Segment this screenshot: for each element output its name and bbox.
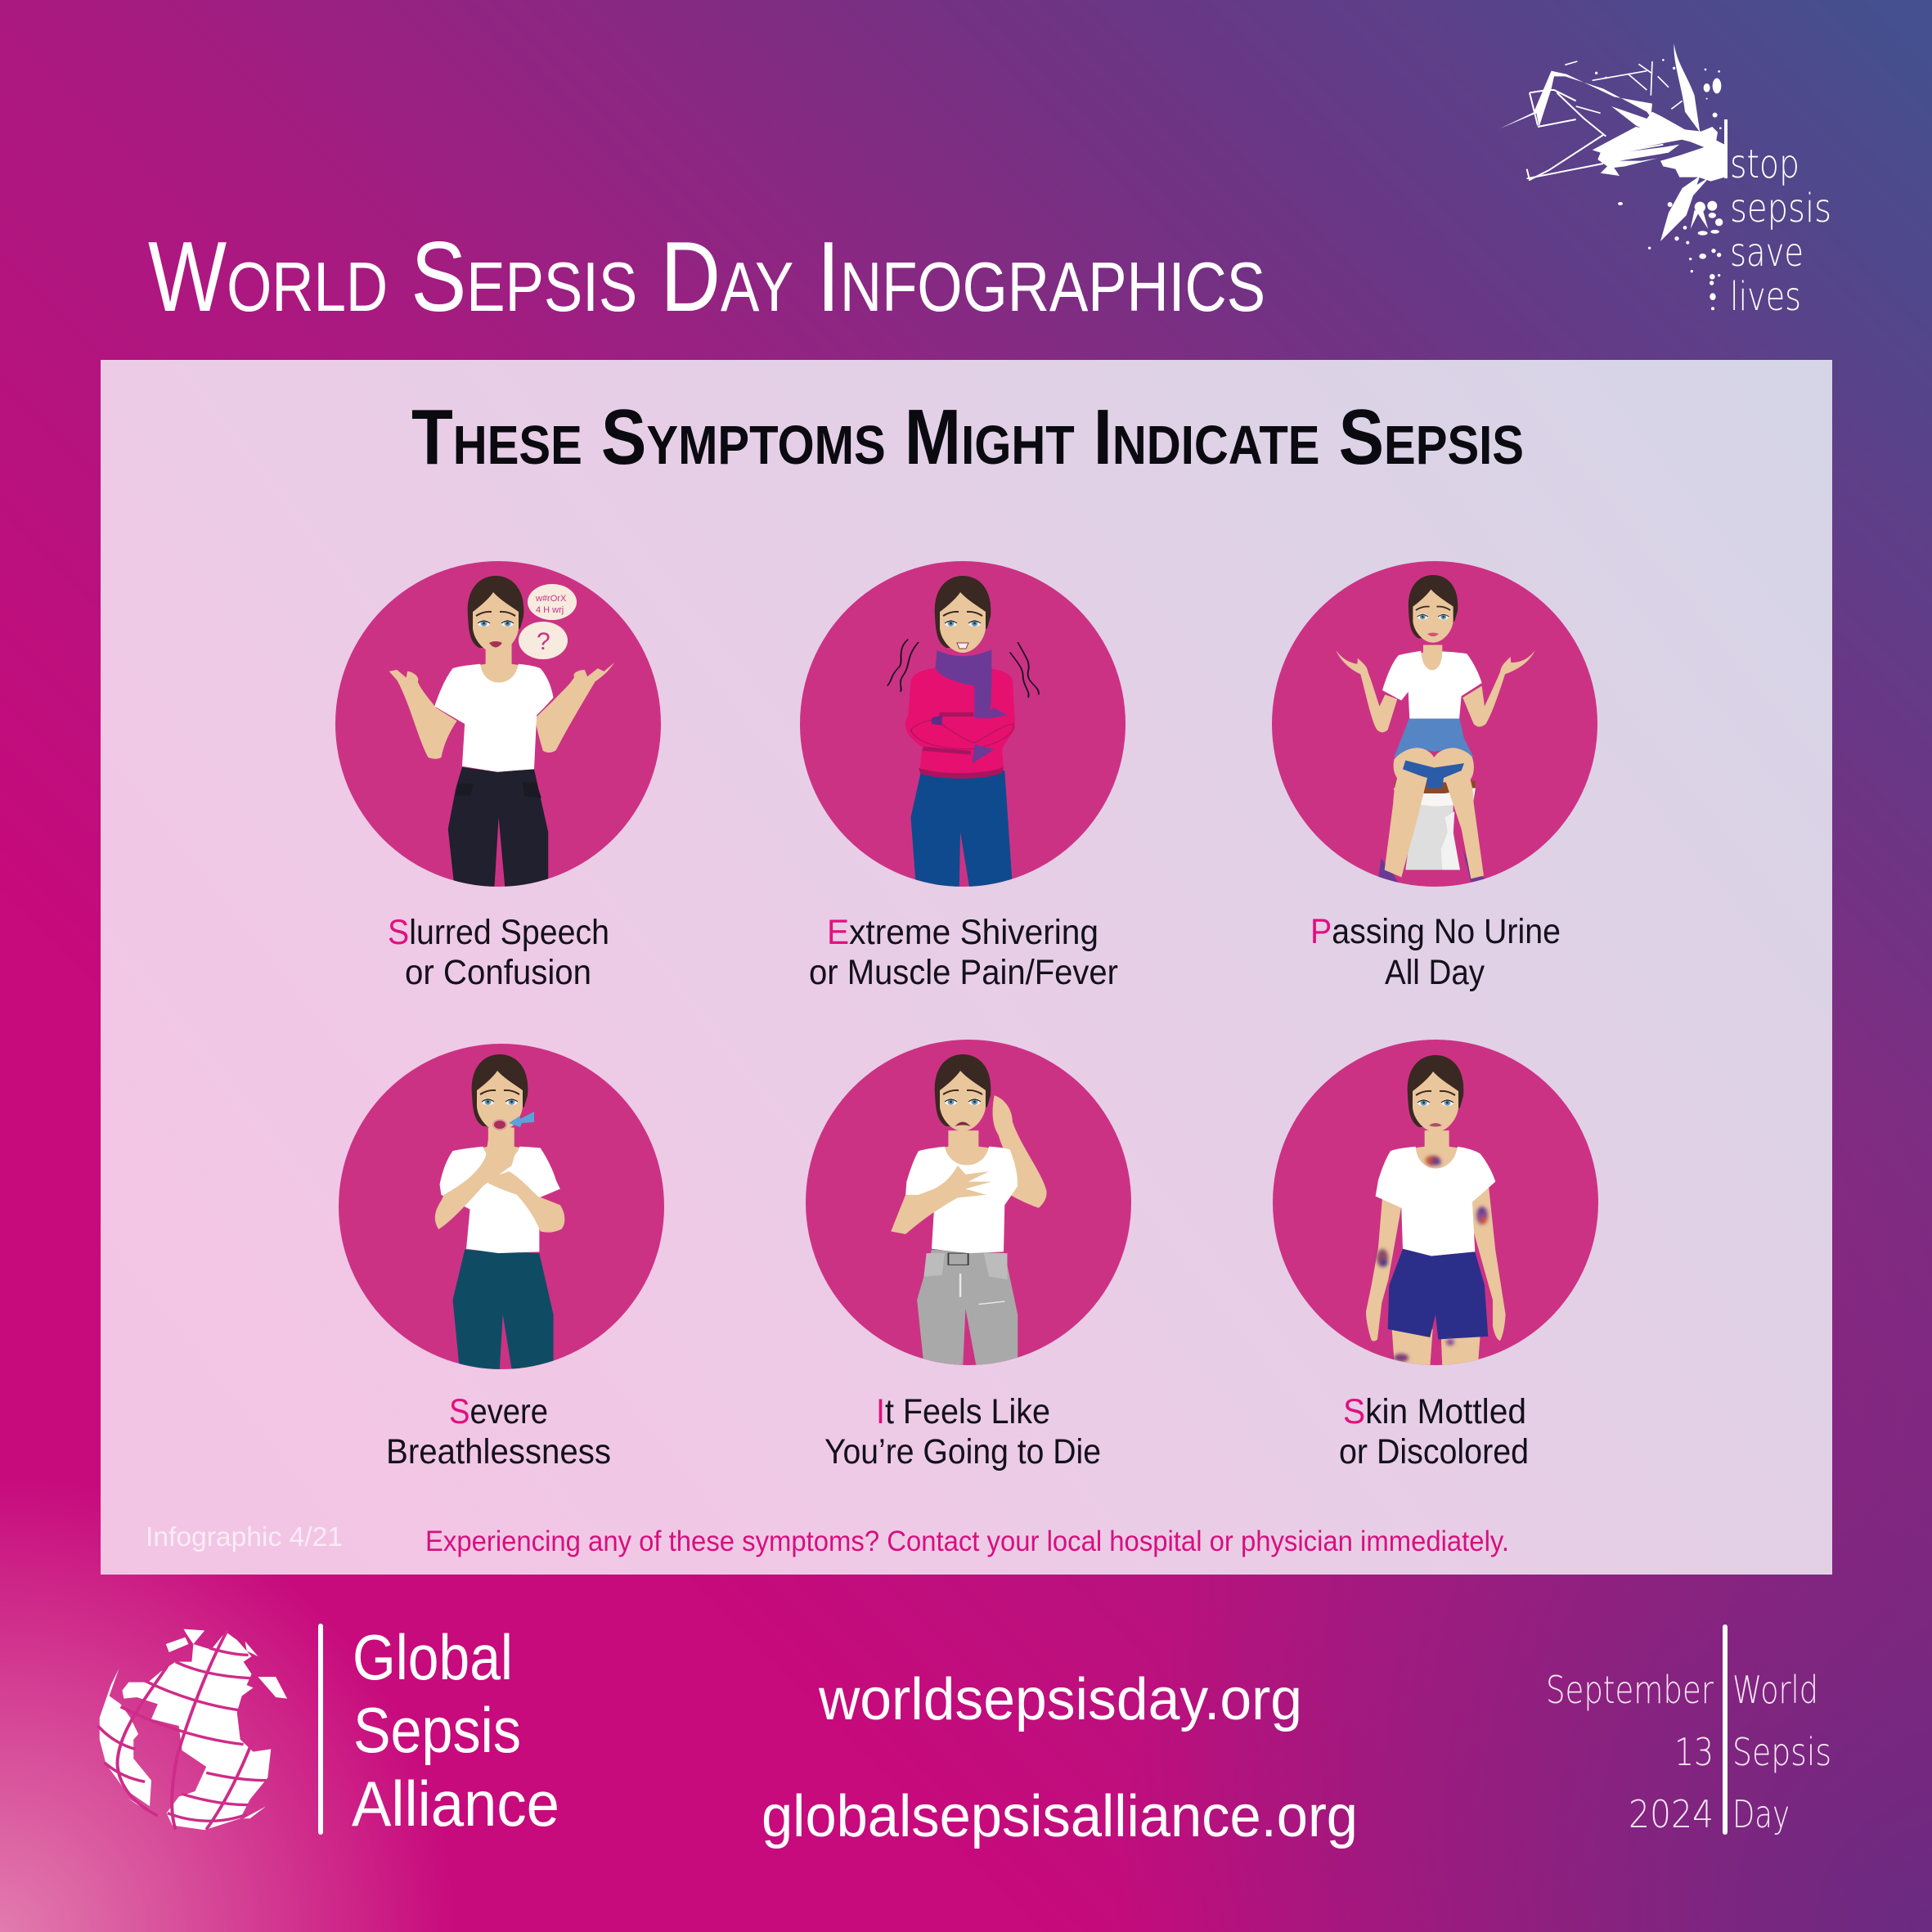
mouth [493, 1120, 506, 1130]
symptom: extreme shivering [800, 561, 1126, 992]
websites [762, 1667, 1358, 1849]
divider [318, 1624, 323, 1835]
symptom: slurred speech [335, 561, 661, 992]
date [1546, 1668, 1831, 1836]
organisation name: Sepsis [353, 1694, 521, 1766]
caption: Passing No Urine [1310, 912, 1561, 951]
thought bubbles: 4 H wrj [536, 605, 564, 615]
symptom: passing no urine [1272, 561, 1597, 992]
caption [1339, 1392, 1529, 1471]
date: World [1732, 1668, 1818, 1712]
vertical bar [1724, 119, 1728, 178]
circle [1272, 561, 1597, 887]
date block [1546, 1624, 1831, 1836]
logo words [1730, 142, 1831, 320]
symptom: it feels like dying [806, 1040, 1131, 1471]
figure: shivering woman [887, 576, 1039, 887]
circle [806, 1040, 1131, 1365]
mouth [1427, 633, 1439, 636]
circle [335, 561, 661, 887]
caption: Breathlessness [386, 1432, 611, 1471]
thought bubbles: w#rOrX [535, 594, 567, 604]
icon: breath arrow [509, 1112, 534, 1127]
circle [800, 561, 1126, 887]
mouth [1429, 1123, 1442, 1127]
thought bubbles: ? [537, 628, 550, 655]
date: Sepsis [1732, 1730, 1831, 1774]
figure: woman holding chest [891, 1054, 1047, 1365]
logo words: sepsis [1730, 186, 1831, 231]
organisation name: Alliance [352, 1768, 559, 1840]
logo words: lives [1730, 274, 1801, 320]
figure: breathless woman [435, 1054, 564, 1369]
date: Day [1732, 1792, 1790, 1836]
divider [1723, 1624, 1728, 1835]
heading: These Symptoms Might Indicate Sepsis [411, 393, 1524, 481]
caption: Extreme Shivering [827, 913, 1099, 952]
mouth [956, 1122, 969, 1126]
date: 2024 [1629, 1792, 1714, 1836]
logo: stop sepsis save lives [1499, 43, 1831, 320]
mouth [489, 641, 502, 648]
figure: woman with mottled skin [1366, 1055, 1506, 1367]
thought bubbles [519, 584, 577, 659]
call to action: Experiencing any of these symptoms? Contact your local hospital or physician immediately. [425, 1525, 1509, 1557]
circle [1273, 1040, 1598, 1365]
panel: symptoms [101, 360, 1832, 1575]
symptom: severe breathlessness [339, 1044, 664, 1471]
infographic counter: Infographic 4/21 [146, 1521, 343, 1552]
shiver lines [887, 639, 1039, 698]
caption [809, 913, 1118, 992]
mouth [957, 643, 968, 649]
circle [339, 1044, 664, 1369]
caption: or Muscle Pain/Fever [809, 953, 1118, 992]
date: September [1546, 1668, 1714, 1712]
caption: or Discolored [1339, 1432, 1529, 1471]
websites: globalsepsisalliance.org [762, 1784, 1358, 1849]
logo: global sepsis alliance [98, 1621, 559, 1840]
caption [824, 1392, 1101, 1471]
caption: You’re Going to Die [824, 1432, 1101, 1471]
caption [386, 1392, 611, 1471]
date: 13 [1674, 1730, 1714, 1774]
caption [388, 913, 609, 992]
websites: worldsepsisday.org [818, 1667, 1302, 1732]
caption: Severe [449, 1392, 548, 1431]
caption: or Confusion [405, 953, 591, 992]
figure: woman on toilet [1336, 575, 1535, 883]
icon: splatter [1499, 43, 1724, 310]
logo words: save [1730, 230, 1804, 276]
caption: Skin Mottled [1343, 1392, 1526, 1431]
bruises [1377, 1156, 1488, 1362]
caption: All Day [1385, 953, 1485, 992]
caption: Slurred Speech [388, 913, 609, 952]
figure: confused woman [381, 576, 614, 887]
icon: globe [98, 1629, 287, 1830]
symptom: skin mottled [1273, 1040, 1598, 1471]
organisation name [352, 1621, 559, 1840]
caption: It Feels Like [876, 1392, 1050, 1431]
logo words: stop [1730, 142, 1799, 187]
title: World Sepsis Day Infographics [148, 221, 1265, 332]
caption [1310, 912, 1561, 992]
organisation name: Global [353, 1621, 513, 1693]
